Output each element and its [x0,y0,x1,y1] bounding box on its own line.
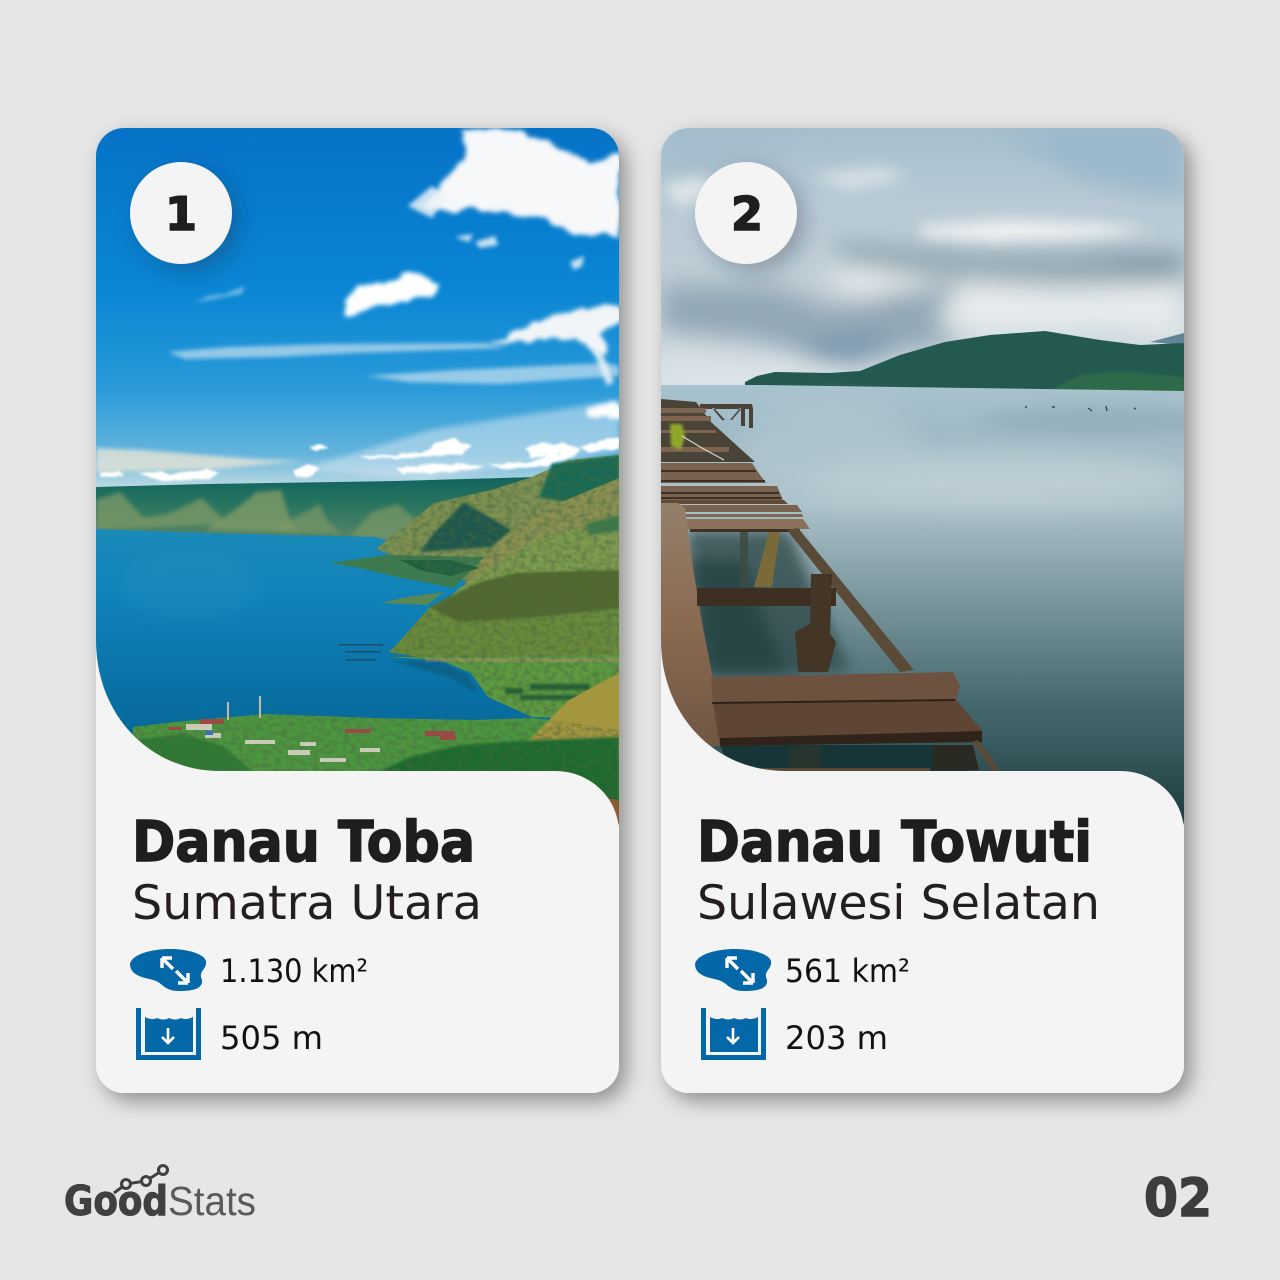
far pier [700,404,753,428]
depth value: 505 m [220,1019,323,1057]
logo wordmark stats: Stats [168,1178,256,1224]
card base 1 [96,128,619,1093]
logo: GoodStats [64,1166,256,1225]
diagonal beam [787,528,914,672]
lake [96,529,552,735]
panel shape: text panel 1 [96,640,619,1093]
icon: lake depth [701,1008,766,1060]
pier [661,399,1000,771]
panel: Danau Toba card [96,128,619,1093]
icon: lake area [130,949,206,991]
heading: Danau Towuti: Danau Towuti [697,810,1092,875]
lake surface [661,385,1184,848]
icon: lake depth [136,1008,201,1060]
foreground village [133,644,619,840]
pier reflections [685,530,850,678]
page number: 02 [1144,1168,1212,1229]
subheading: Sumatra Utara: Sumatra Utara [132,876,482,931]
photo: Lake Towuti [661,128,1184,825]
panel: Danau Towuti card [621,128,1220,1093]
subheading: Sulawesi Selatan: Sulawesi Selatan [697,876,1100,931]
heading: Danau Toba: Danau Toba [132,810,475,875]
photo: Lake Toba [96,128,619,840]
icon: lake area [695,949,771,991]
logo trend line [114,1166,168,1193]
far mountain ridge [96,477,532,540]
area value: 1.130 km² [220,952,368,990]
post [795,574,836,672]
right hillsides [329,455,619,720]
number badge 1 [130,162,232,264]
card base 2 [661,128,1184,1093]
deck planks [661,463,810,529]
logo wordmark good: Good [64,1177,168,1225]
depth value: 203 m [785,1019,888,1057]
lower planks [711,672,960,703]
brace [754,532,780,587]
left beam [661,503,720,746]
number badge 2: 2 [731,187,763,241]
number badge 2 [695,162,797,264]
number badge 1: 1 [165,187,197,241]
mountains [880,362,928,372]
distant cream cloud band [96,448,304,472]
panel shape: text panel 2 [661,640,1184,1093]
area value: 561 km² [785,952,910,990]
cross beam [697,588,836,606]
